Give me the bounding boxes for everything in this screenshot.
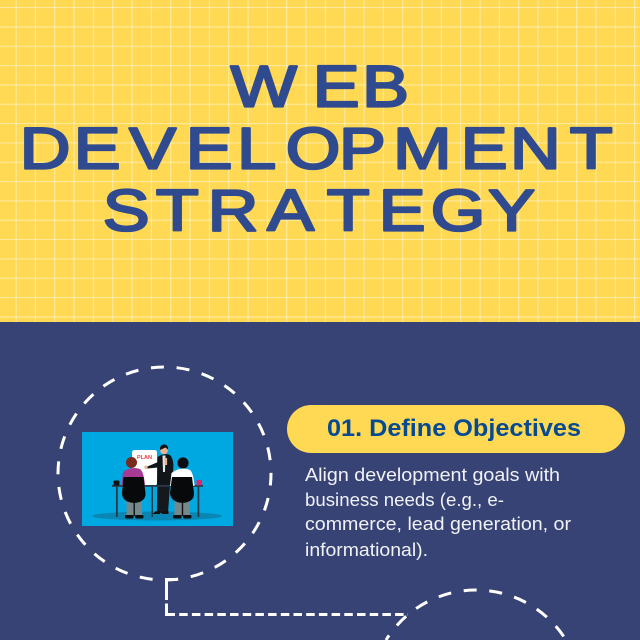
illustration: team planning meeting xyxy=(82,432,233,526)
description text: step 1: commerce, lead generation, or xyxy=(305,513,571,534)
description text: step 1 xyxy=(305,464,571,560)
presenter xyxy=(144,444,173,514)
left seated person xyxy=(122,457,146,518)
presentation board xyxy=(132,450,157,486)
table and cups xyxy=(112,480,203,517)
heading pill: step 1: 01. Define Objectives xyxy=(327,415,581,442)
header panel: yellow grid background xyxy=(0,0,640,322)
presentation board: PLAN xyxy=(137,455,152,461)
floor shadow xyxy=(92,512,222,520)
panel: navy lower background xyxy=(0,322,640,640)
title: DEVELOPMENT xyxy=(20,116,613,181)
title: WEB xyxy=(231,54,409,119)
right seated person xyxy=(170,457,194,518)
connector arrow between step circles xyxy=(166,580,408,614)
heading pill: step 1 xyxy=(287,405,625,453)
description text: step 1: business needs (e.g., e- xyxy=(305,489,504,510)
title xyxy=(20,54,613,243)
dashed circle: step 1 xyxy=(58,367,271,580)
description text: step 1: Align development goals with xyxy=(305,464,560,485)
dashed circle: step 2 xyxy=(386,590,566,640)
title: STRATEGY xyxy=(103,178,535,243)
description text: step 1: informational). xyxy=(305,539,428,560)
